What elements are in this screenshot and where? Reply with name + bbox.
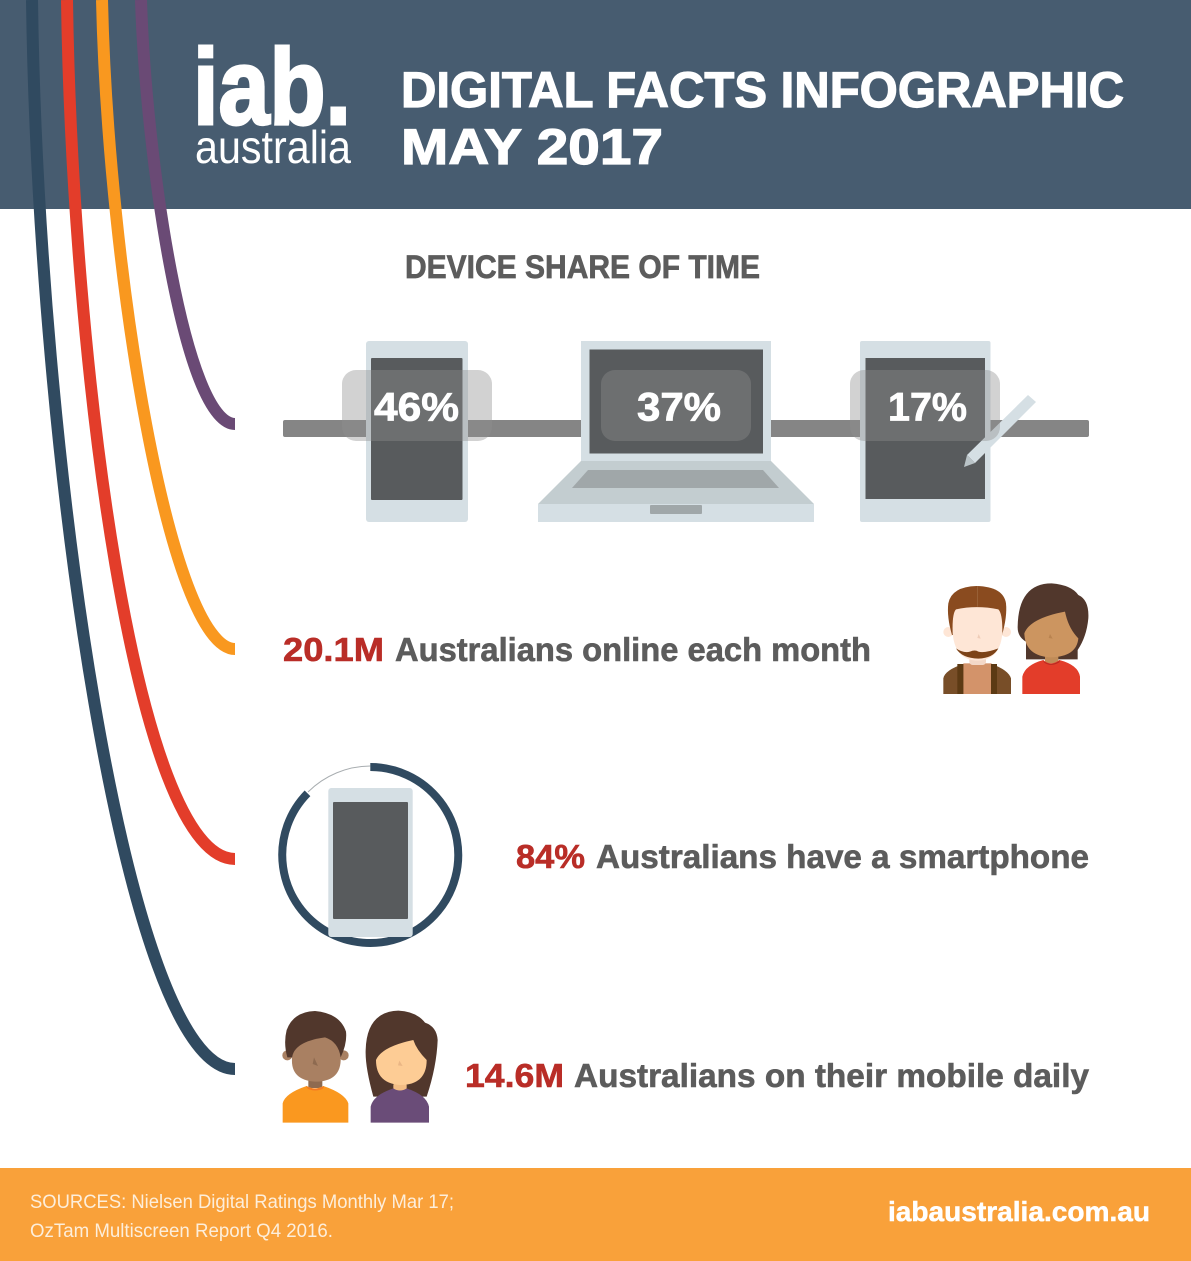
icon: smartphone <box>366 341 468 522</box>
heading: device share of time: DEVICE SHARE OF TIME <box>405 249 760 285</box>
website url: iabaustralia.com.au <box>888 1196 1150 1227</box>
sources <box>30 1192 454 1242</box>
device share bar <box>283 420 1089 437</box>
title <box>401 62 1124 175</box>
stat: 14.6M mobile daily: 14.6M <box>465 1057 564 1094</box>
stat: 14.6M mobile daily: Australians on their mobile daily <box>574 1057 1090 1094</box>
stat: 17% tablet <box>850 370 1000 441</box>
stat: 20.1M Australians online: 20.1M <box>283 631 384 668</box>
stat: 46% smartphone: 46% <box>374 386 459 430</box>
logo: iab australia: australia <box>195 121 351 173</box>
stat: 37% laptop <box>601 370 751 441</box>
icon: laptop <box>538 341 814 522</box>
footer band <box>0 1168 1191 1261</box>
header band <box>0 0 1191 209</box>
stat: 37% laptop: 37% <box>637 386 721 430</box>
sources: SOURCES: Nielsen Digital Ratings Monthly Mar 17; <box>30 1192 454 1213</box>
logo: iab australia: iab. <box>193 26 351 147</box>
sources: OzTam Multiscreen Report Q4 2016. <box>30 1221 333 1242</box>
stat: 84% smartphone: Australians have a smartphone <box>596 838 1089 875</box>
icon: man and woman <box>943 583 1088 694</box>
title: MAY 2017 <box>401 119 663 175</box>
stat: 20.1M Australians online: Australians online each month <box>395 631 871 668</box>
stat: 84% smartphone: 84% <box>516 838 585 875</box>
icon: tablet with stylus <box>860 341 1036 522</box>
icon: boy and girl <box>282 1011 438 1123</box>
title: DIGITAL FACTS INFOGRAPHIC <box>401 62 1124 118</box>
stat: 17% tablet: 17% <box>888 386 967 430</box>
stat: 46% smartphone <box>342 370 492 441</box>
icon: smartphone in 84% ring <box>282 766 458 943</box>
timeline curves <box>32 0 235 1069</box>
